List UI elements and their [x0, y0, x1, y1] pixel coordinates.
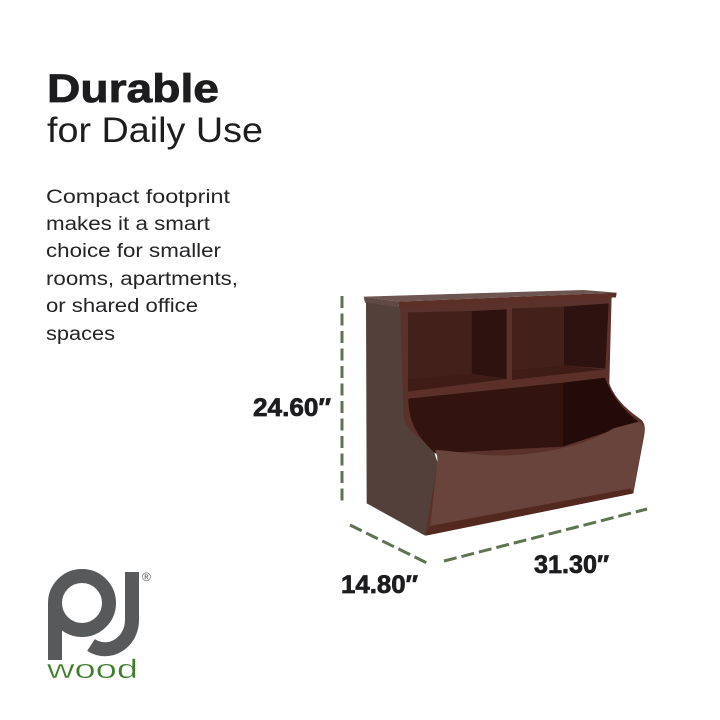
cabinet lip side — [364, 297, 399, 307]
logo letter p — [55, 576, 109, 660]
width label: 31.30″ — [534, 551, 609, 579]
body text: rooms, apartments, — [46, 269, 238, 290]
depth label: 14.80″ — [341, 571, 418, 599]
shelf surfaces — [408, 374, 507, 392]
body text: spaces — [46, 324, 115, 345]
bin interior right side — [563, 378, 639, 447]
right compartment back — [512, 307, 564, 370]
body text: makes it a smart — [46, 214, 211, 235]
body text: or shared office — [46, 296, 198, 317]
width dimension line — [444, 509, 647, 561]
title: for Daily Use — [47, 111, 263, 150]
logo wordmark: wood — [46, 654, 138, 684]
depth dimension line — [350, 525, 427, 563]
bin front panel — [430, 422, 644, 528]
left compartment side — [472, 309, 507, 379]
left compartment back — [408, 311, 472, 379]
logo registered mark: ® — [142, 570, 151, 584]
body text: Compact footprint — [46, 187, 231, 208]
right compartment side — [564, 303, 609, 369]
top front edge — [398, 293, 617, 307]
logo letter j — [91, 572, 132, 649]
cabinet product image — [364, 290, 645, 536]
body text: choice for smaller — [46, 241, 222, 262]
lower bin interior — [408, 383, 563, 453]
title: Durable — [47, 67, 219, 111]
cabinet side panel — [366, 302, 437, 536]
shelf front edge — [408, 369, 605, 397]
bin front lower edge — [426, 488, 633, 536]
cabinet front frame — [400, 295, 645, 536]
cabinet top surface — [364, 290, 617, 302]
logo — [46, 570, 151, 684]
body text — [46, 187, 238, 345]
height label: 24.60″ — [253, 394, 331, 422]
title — [47, 67, 263, 150]
height dimension line — [340, 296, 344, 506]
